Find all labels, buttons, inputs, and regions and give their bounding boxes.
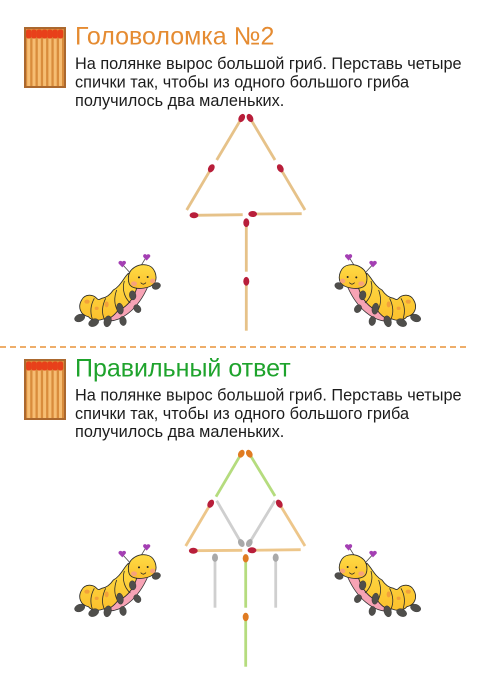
- icon: left caterpillar: [73, 254, 162, 328]
- text block: answer description: получилось два маленьких.: [75, 423, 284, 441]
- diagram: solution with moved matches: [186, 449, 305, 667]
- text block: answer description: На полянке вырос большой гриб. Перставь четыре: [75, 386, 462, 404]
- icon: right caterpillar: [334, 544, 422, 618]
- icon: right caterpillar: [334, 254, 422, 328]
- panel: puzzle: [24, 22, 462, 331]
- text block: puzzle description: получилось два маленьких.: [75, 92, 284, 110]
- heading: answer title: Правильный ответ: [75, 355, 291, 383]
- dashed divider: [0, 346, 468, 348]
- icon: matchbox: [24, 359, 66, 420]
- icon: matchbox: [24, 27, 66, 88]
- icon: left caterpillar: [73, 544, 162, 618]
- text block: answer description: спички так, чтобы из одного большого гриба: [75, 405, 410, 423]
- text block: puzzle description: спички так, чтобы из одного большого гриба: [75, 74, 410, 92]
- text block: puzzle description: На полянке вырос большой гриб. Перставь четыре: [75, 55, 462, 73]
- panel: correct answer: [24, 355, 462, 667]
- diagram: match mushroom: [187, 113, 305, 331]
- heading: puzzle title: Головоломка №2: [75, 22, 274, 50]
